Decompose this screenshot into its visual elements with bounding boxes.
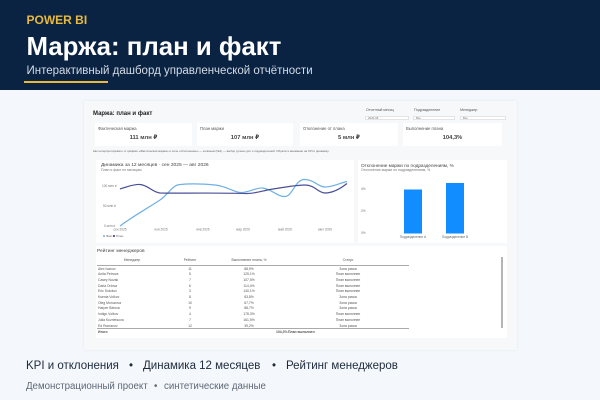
managers table: 161,5%	[243, 318, 255, 322]
KPI: actual margin: 111 млн ₽	[130, 134, 157, 140]
managers table: 10	[188, 301, 192, 305]
managers table: Julia Kuznetsova	[98, 318, 124, 322]
table heading: Рейтинг менеджеров	[97, 249, 145, 254]
managers table: 39,2%	[244, 324, 254, 328]
filters	[365, 108, 506, 120]
managers table: 4	[189, 312, 191, 316]
KPI: plan margin	[197, 123, 293, 146]
managers table	[97, 258, 409, 334]
table scrollbar	[501, 257, 503, 328]
footer features line	[26, 360, 398, 372]
managers table: 6	[189, 284, 191, 288]
KPI: deviation: Отклонение от плана	[303, 126, 345, 131]
managers table: Indigo Volkov	[98, 312, 118, 316]
line chart subtitle: План и факт по месяцам	[101, 168, 141, 172]
footer features line: Динамика 12 месяцев	[143, 360, 260, 372]
managers table: Oleg Morozova	[98, 301, 121, 305]
managers table: 5	[189, 272, 191, 276]
bar chart: 4%	[361, 187, 366, 191]
managers table: 88,7%	[244, 306, 254, 310]
managers table: Ed Romanov	[98, 324, 118, 328]
table total row: План выполнен	[288, 330, 315, 334]
KPI: plan completion: Выполнение плана	[406, 126, 443, 131]
footer features line: •	[129, 360, 133, 372]
KPI: plan completion	[403, 123, 502, 146]
legend	[103, 234, 124, 238]
managers table: План выполнен	[336, 312, 360, 316]
dashboard screenshot panel	[84, 101, 517, 350]
KPI: plan completion: 104,3%	[443, 134, 462, 140]
line chart: 50 млн ₽	[103, 204, 116, 208]
accent underline	[24, 81, 108, 83]
line chart: ноя 2025	[154, 228, 168, 232]
managers table: 83,8%	[244, 295, 254, 299]
bar chart: Подразделение B	[442, 235, 468, 239]
managers table: 3	[189, 289, 191, 293]
managers table: 125,1%	[243, 272, 255, 276]
managers table: Зона риска	[339, 306, 357, 310]
bar: department B	[446, 183, 464, 234]
footer note: Демонстрационный проект	[26, 381, 148, 392]
managers table: Зона риска	[339, 301, 357, 305]
dashboard heading: Маржа: план и факт	[93, 111, 152, 117]
footer note: •	[154, 381, 157, 392]
dashboard background	[84, 101, 517, 350]
KPI: plan margin: План маржи	[200, 126, 224, 131]
managers table: План выполнен	[336, 284, 360, 288]
plan line	[120, 184, 347, 194]
bar chart subtitle: Отклонение маржи по подразделениям, %	[361, 168, 430, 172]
managers table: Ksenia Volkov	[98, 295, 119, 299]
table panel	[96, 246, 507, 338]
managers table: План выполнен	[336, 278, 360, 282]
filter: department	[413, 108, 455, 120]
filter: manager: Менеджер	[460, 108, 477, 112]
table header row	[124, 258, 354, 262]
managers table: 88,9%	[244, 266, 254, 270]
footer features line: •	[272, 360, 276, 372]
footer features line: Рейтинг менеджеров	[286, 360, 398, 372]
line chart: 100 млн ₽	[102, 184, 117, 188]
managers table: Alex Ivanov	[98, 266, 116, 270]
managers table: Anita Petrova	[98, 272, 118, 276]
line chart panel	[96, 160, 354, 243]
header banner	[0, 0, 600, 90]
line chart: янв 2026	[196, 228, 210, 232]
managers table: 178,3%	[243, 312, 255, 316]
table header row: Рейтинг	[184, 258, 196, 262]
managers table: 114,4%	[243, 284, 255, 288]
managers table: План выполнен	[336, 272, 360, 276]
filter: manager: Все	[463, 116, 468, 120]
managers table: 7	[189, 278, 191, 282]
line chart: май 2026	[278, 228, 292, 232]
line chart: 0 млн ₽	[104, 224, 115, 228]
managers table: 12	[188, 324, 192, 328]
KPI: plan margin: 107 млн ₽	[231, 134, 259, 140]
managers table: 9	[189, 306, 191, 310]
managers table: 8	[189, 295, 191, 299]
managers table: 7	[189, 318, 191, 322]
KPI: deviation	[300, 123, 398, 146]
managers table: Зона риска	[339, 324, 357, 328]
managers table: Harper Belova	[98, 306, 120, 310]
managers table: Eric Sokolov	[98, 289, 117, 293]
eyebrow: Power BI: POWER BI	[26, 13, 87, 27]
note line: Как интерпретировать: в графике «Фактическая маржа» и поле «Отклонение» — зелёным (№1) — выбор ручных дат и подразделений. Обратите внимание на KPI и динамику.	[93, 149, 329, 153]
table total row	[98, 330, 315, 334]
title: Маржа: план и факт	[26, 33, 281, 61]
managers table: Зона риска	[339, 295, 357, 299]
KPI: deviation: 5 млн ₽	[338, 134, 360, 140]
footer note: синтетические данные	[164, 381, 266, 392]
filter: month: Отчетный месяц	[366, 108, 394, 112]
filter: month: 2026-08	[368, 116, 378, 120]
legend: План	[116, 234, 124, 238]
managers table: План выполнен	[336, 289, 360, 293]
table total row: 104,3%	[276, 330, 288, 334]
line chart	[102, 178, 348, 238]
bar chart: Подразделение A	[400, 235, 427, 239]
line chart: мар 2026	[236, 228, 250, 232]
filter: department: Все	[416, 116, 421, 120]
table total row: Итого	[98, 330, 108, 334]
line chart: сен 2025	[113, 228, 127, 232]
bar chart title: Отклонение маржи по подразделениям, %	[361, 163, 454, 168]
subtitle: Интерактивный дашборд управленческой отчётности	[26, 65, 313, 77]
footer features line: KPI и отклонения	[26, 360, 119, 372]
legend: Факт	[106, 234, 113, 238]
filter: manager	[460, 108, 506, 120]
managers table: 11	[188, 266, 192, 270]
table header row: Статус	[343, 258, 353, 262]
table header row: Выполнение плана, %	[231, 258, 267, 262]
bar chart: 2%	[361, 209, 366, 213]
filter: department: Подразделение	[414, 108, 440, 112]
managers table: 107,5%	[243, 278, 255, 282]
line chart title: Динамика за 12 месяцев · сен 2025 — авг 2026	[101, 163, 209, 168]
filter: month	[365, 108, 409, 120]
managers table: 140,1%	[243, 289, 255, 293]
managers table: План выполнен	[336, 318, 360, 322]
KPI: actual margin: Фактическая маржа	[98, 126, 137, 131]
fact line	[120, 179, 347, 226]
KPI: actual margin	[95, 123, 192, 146]
line chart: июл 2026	[318, 228, 332, 232]
footer note	[26, 381, 266, 392]
bar chart	[361, 183, 468, 239]
bar: department A	[404, 190, 422, 234]
managers table: Daria Orlova	[98, 284, 117, 288]
managers table: 67,7%	[244, 301, 254, 305]
bar chart panel	[358, 160, 507, 243]
managers table: Casey Novak	[98, 278, 118, 282]
bar chart: 0%	[361, 231, 366, 235]
managers table: Зона риска	[339, 266, 357, 270]
table header row: Менеджер	[124, 258, 140, 262]
